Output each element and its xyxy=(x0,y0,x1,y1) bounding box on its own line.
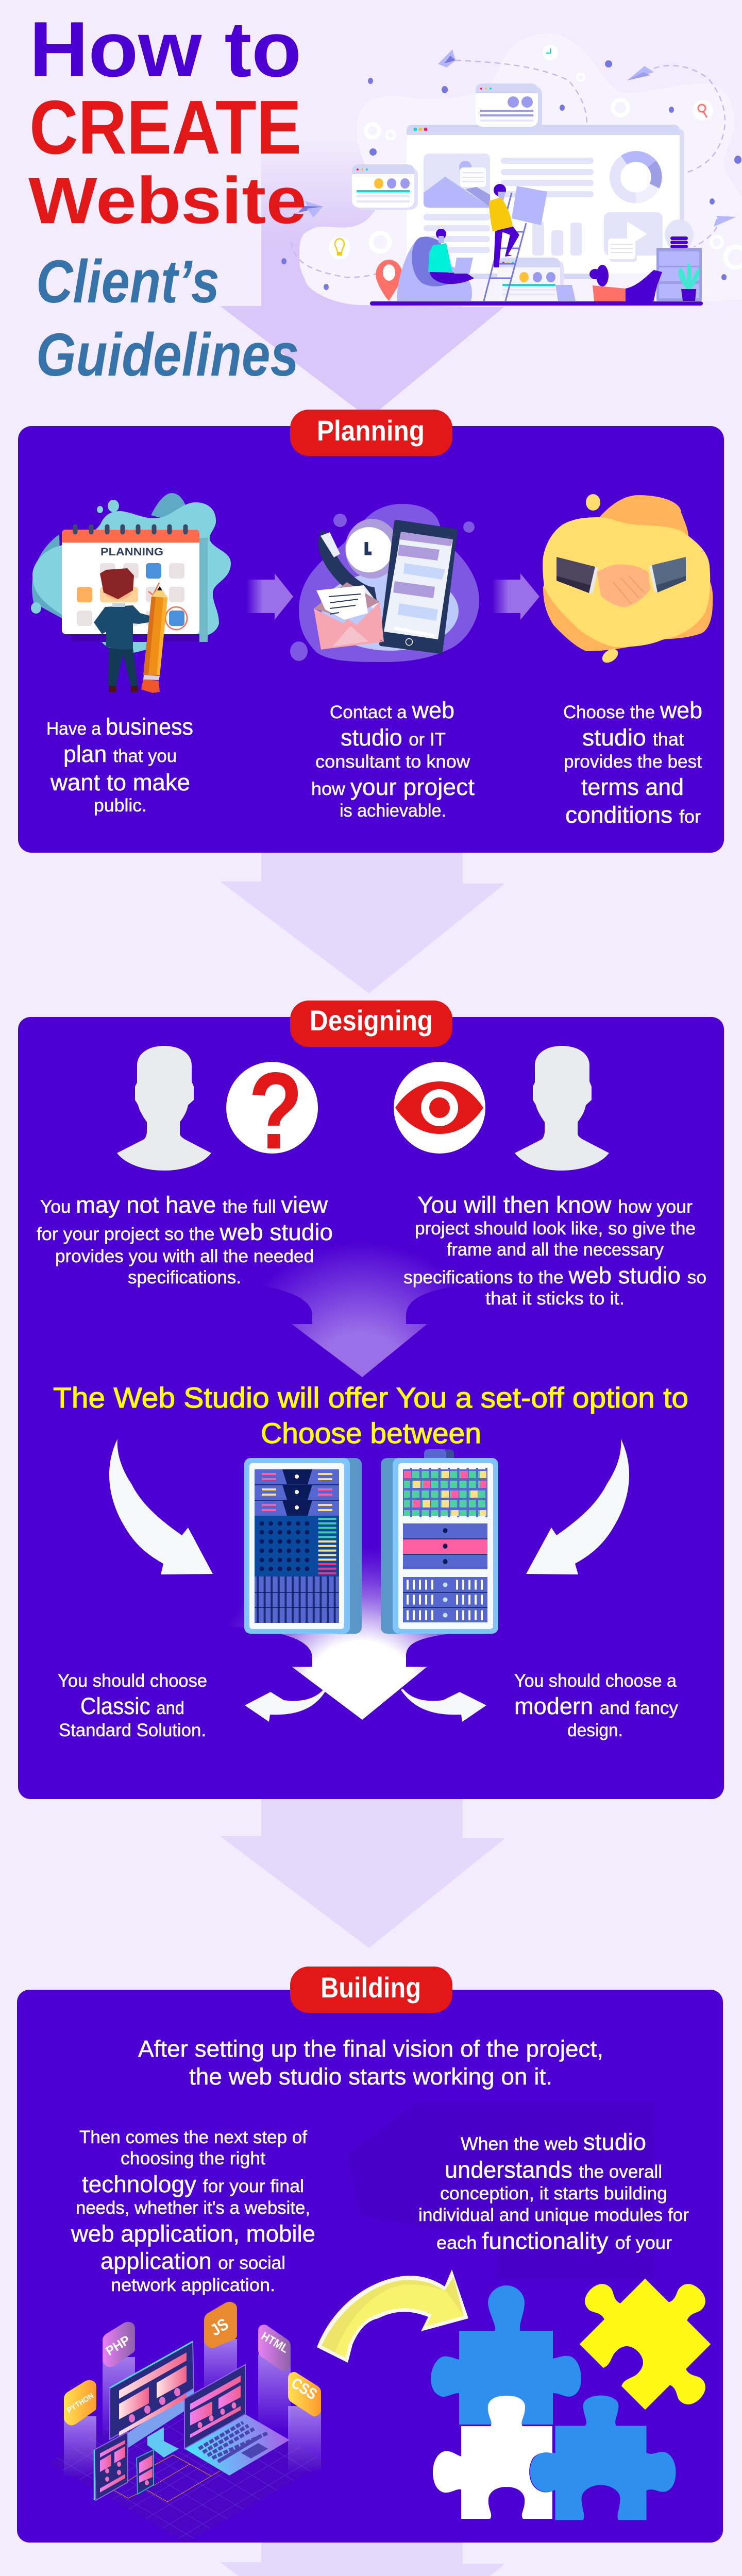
icon: calendar with planner xyxy=(31,493,231,693)
text: step one xyxy=(46,714,193,816)
arrow: yellow curved xyxy=(317,2269,468,2363)
text: step two: how your project xyxy=(311,774,475,800)
tag glow columns xyxy=(64,2339,321,2478)
icon: person silhouette right xyxy=(515,1046,609,1171)
gears xyxy=(366,74,742,267)
text: modules: understands the overall xyxy=(445,2157,662,2183)
panel: planning xyxy=(18,410,724,853)
heading: Building: Building xyxy=(321,1971,421,2004)
text: step one: Have a business xyxy=(46,714,193,740)
text: step two xyxy=(311,697,475,821)
text: choosing technology xyxy=(71,2127,315,2295)
orange wires xyxy=(114,2455,220,2502)
background blob xyxy=(299,33,742,307)
heading: Designing: Designing xyxy=(310,1004,433,1037)
text: classic option xyxy=(58,1671,207,1740)
text: choosing technology: web application, mobile xyxy=(71,2221,315,2247)
puzzle piece: bottom blue xyxy=(529,2395,677,2521)
subtitle line: Guidelines: Guidelines xyxy=(36,321,299,389)
text: designing left: You may not have the full view xyxy=(40,1192,328,1218)
heading: web studio offer xyxy=(53,1381,688,1449)
text: step one: public. xyxy=(94,795,147,816)
arrow: small right xyxy=(401,1689,486,1722)
phone xyxy=(137,2450,154,2494)
title line: CREATE: CREATE xyxy=(29,85,301,170)
text: designing left: provides you with all the needed xyxy=(55,1246,314,1266)
arrow: gradient down from servers xyxy=(196,1546,531,1720)
tag: JS xyxy=(204,2302,237,2348)
arrow: curved left to servers xyxy=(109,1439,213,1574)
white badges xyxy=(543,45,558,60)
arrow: header to planning xyxy=(220,139,504,418)
paper planes xyxy=(298,49,736,227)
illustration: isometric devices xyxy=(48,2302,326,2543)
text: choosing technology: choosing the right xyxy=(121,2148,265,2168)
upper floating window xyxy=(479,87,542,129)
heading: web studio offer: The Web Studio will offer You a set-off option to xyxy=(53,1381,688,1414)
text: modern option xyxy=(514,1671,678,1740)
left floating window xyxy=(356,167,418,210)
text: classic option: You should choose xyxy=(58,1671,207,1691)
video card xyxy=(604,212,663,256)
tag: PYTHON xyxy=(64,2380,96,2426)
text: designing left: for your project so the web studio xyxy=(37,1219,333,1245)
text: step two: consultant to know xyxy=(315,752,470,772)
tag: PHP xyxy=(103,2322,135,2367)
arrow: building to launching xyxy=(220,2537,505,2576)
plant xyxy=(678,262,700,289)
panel: building xyxy=(17,1967,742,2543)
tag: HTML: HTML xyxy=(259,2329,291,2355)
text: building intro: After setting up the final vision of the project, xyxy=(138,2036,603,2062)
text: designing left: specifications. xyxy=(128,1267,241,1287)
text: step three: terms and xyxy=(581,774,684,800)
text: step two: is achievable. xyxy=(340,801,446,821)
image card xyxy=(424,154,490,208)
lying person xyxy=(555,285,576,301)
puzzle piece: yellow xyxy=(558,2235,742,2432)
text: designing left xyxy=(37,1192,333,1287)
arrow: step one to step two xyxy=(246,573,293,620)
donut chart xyxy=(615,157,656,198)
text: designing right: specifications to the web studio so xyxy=(403,1262,706,1289)
puzzle piece: white xyxy=(433,2396,552,2519)
isometric grid floor xyxy=(48,2378,326,2543)
text: modules: conception, it starts building xyxy=(440,2183,667,2204)
text: classic option: Classic and xyxy=(80,1693,184,1719)
bottom floating window xyxy=(501,261,564,301)
text: step three: Choose the web xyxy=(563,697,702,723)
arrow: step two to step three xyxy=(492,573,539,620)
subtitle line: Client's: Client’s xyxy=(36,248,220,316)
text: designing right: that it sticks to it. xyxy=(485,1289,625,1309)
icon: eye xyxy=(394,1062,485,1154)
title line: How to: How to xyxy=(29,6,301,93)
icon: phone, clock and envelope xyxy=(290,504,479,662)
text: choosing technology: Then comes the next step of xyxy=(79,2127,307,2147)
text: building intro xyxy=(138,2036,603,2090)
text: step three: studio that xyxy=(582,724,684,751)
title: How to CREATE Website Client's Guidelines xyxy=(28,6,307,389)
arrow: gradient down to offer xyxy=(196,1236,531,1377)
icon: puzzle pieces xyxy=(431,2235,742,2521)
text: building intro: the web studio starts working on it. xyxy=(189,2063,552,2090)
ladder person xyxy=(484,193,526,301)
arrow: planning to designing xyxy=(220,845,505,993)
text: designing right: You will then know how your xyxy=(417,1192,693,1218)
monitor xyxy=(147,2427,179,2458)
text: step three: provides the best xyxy=(564,752,702,772)
heading: Designing xyxy=(290,1001,452,1047)
icon: question mark: ? xyxy=(248,1049,303,1172)
laptop xyxy=(184,2414,290,2476)
text: modules xyxy=(418,2129,689,2254)
text: modules: When the web studio xyxy=(461,2129,646,2155)
icon: calendar with planner: PLANNING xyxy=(100,546,163,558)
text: modules: individual and unique modules for xyxy=(418,2205,689,2225)
text: modern option: design. xyxy=(567,1720,623,1740)
arrow: curved right to servers xyxy=(526,1439,629,1574)
tag: PHP: PHP xyxy=(103,2333,133,2359)
icon: handshake xyxy=(543,494,713,666)
illustration: website team xyxy=(281,33,742,307)
text: step two: studio or IT xyxy=(341,724,446,751)
icon: modern server xyxy=(381,1449,498,1634)
lightbulb and cabinet xyxy=(665,219,694,258)
seated person on beanbag xyxy=(397,237,472,301)
arrow: small left xyxy=(245,1689,326,1722)
tag: PYTHON: PYTHON xyxy=(65,2392,95,2415)
icon: classic server xyxy=(244,1458,362,1634)
puzzle piece: top blue xyxy=(431,2285,581,2425)
arrow: designing to building xyxy=(220,1793,505,1948)
tag: JS: JS xyxy=(207,2314,232,2340)
tag: HTML xyxy=(258,2325,291,2371)
text: designing right xyxy=(403,1192,706,1309)
text: modules: each functionality of your xyxy=(436,2228,672,2254)
dashed flight paths xyxy=(291,60,725,277)
text: step one: want to make xyxy=(50,769,190,795)
text: choosing technology: application or social xyxy=(100,2248,285,2274)
text: step one: plan that you xyxy=(63,741,177,767)
map pin xyxy=(376,260,402,301)
text: step two: Contact a web xyxy=(330,697,454,723)
tablet xyxy=(94,2432,128,2500)
heading: Planning: Planning xyxy=(317,414,425,447)
floor line xyxy=(370,301,703,306)
text: choosing technology: network application. xyxy=(111,2275,275,2295)
heading: Building xyxy=(290,1967,452,2013)
title line: Website: Website xyxy=(28,164,307,238)
text: classic option: Standard Solution. xyxy=(59,1720,206,1740)
heading: Planning xyxy=(290,410,452,456)
text: modern option: You should choose a xyxy=(514,1671,677,1691)
panel: designing xyxy=(18,1001,724,1799)
decorative dots xyxy=(281,60,741,290)
text: step three xyxy=(563,697,702,828)
text: choosing technology: technology for your final xyxy=(82,2171,304,2197)
text: designing right: project should look like, so give the xyxy=(415,1218,696,1239)
tag: CSS: CSS xyxy=(288,2375,320,2403)
tag: CSS xyxy=(288,2372,321,2416)
faint background arrow xyxy=(348,2103,653,2279)
text: designing right: frame and all the necessary xyxy=(447,1240,664,1260)
heading: web studio offer: Choose between xyxy=(261,1417,481,1449)
text: choosing technology: needs, whether it's a website, xyxy=(76,2198,310,2218)
text: modern option: modern and fancy xyxy=(514,1693,678,1719)
main browser window xyxy=(412,129,684,273)
icon: person silhouette left xyxy=(117,1046,211,1171)
text: step three: conditions for xyxy=(565,802,701,828)
content lines xyxy=(424,158,594,256)
